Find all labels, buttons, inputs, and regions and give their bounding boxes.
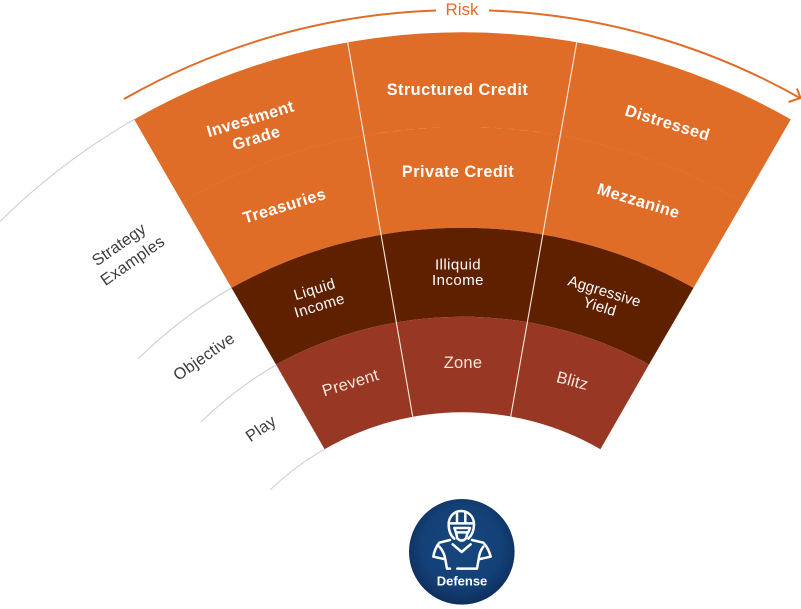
band: play <box>276 317 649 449</box>
liquid income: Income <box>292 290 347 322</box>
play label: Play <box>243 412 280 446</box>
private credit: Private Credit <box>402 163 514 181</box>
investment grade: Grade <box>230 123 283 154</box>
prevent: Prevent <box>320 366 381 400</box>
strategy examples label <box>85 215 168 290</box>
objective labels <box>287 256 643 326</box>
aggressive yield: Aggressive <box>566 273 643 311</box>
treasuries: Treasuries <box>241 185 328 227</box>
investment grade <box>205 97 302 160</box>
strategy examples label: Strategy <box>89 219 150 270</box>
strategy row divider <box>182 127 743 202</box>
defense label: Defense <box>437 574 487 588</box>
band: objective <box>232 228 694 364</box>
strategy labels <box>205 81 712 227</box>
column dividers <box>348 42 577 417</box>
row labels <box>85 215 280 446</box>
risk arrow <box>124 10 800 102</box>
blitz: Blitz <box>554 368 590 394</box>
mezzanine: Mezzanine <box>595 180 682 222</box>
illiquid income: Income <box>432 272 484 289</box>
band: strategy examples <box>134 32 791 288</box>
objective label: Objective <box>170 329 238 385</box>
structured credit: Structured Credit <box>387 81 528 99</box>
illiquid income: Illiquid <box>435 256 481 273</box>
distressed: Distressed <box>623 102 712 145</box>
investment grade: Investment <box>205 97 297 141</box>
liquid income <box>287 274 347 322</box>
risk label: Risk <box>445 0 479 19</box>
play labels <box>320 354 590 400</box>
liquid income: Liquid <box>292 275 338 304</box>
illiquid income <box>432 256 484 289</box>
row guide lines <box>0 119 325 490</box>
aggressive yield: Yield <box>581 294 618 320</box>
icon: football player <box>433 511 491 569</box>
strategy examples label: Examples <box>97 232 168 290</box>
aggressive yield <box>561 273 643 326</box>
defense badge <box>409 499 515 605</box>
zone: Zone <box>444 354 482 372</box>
